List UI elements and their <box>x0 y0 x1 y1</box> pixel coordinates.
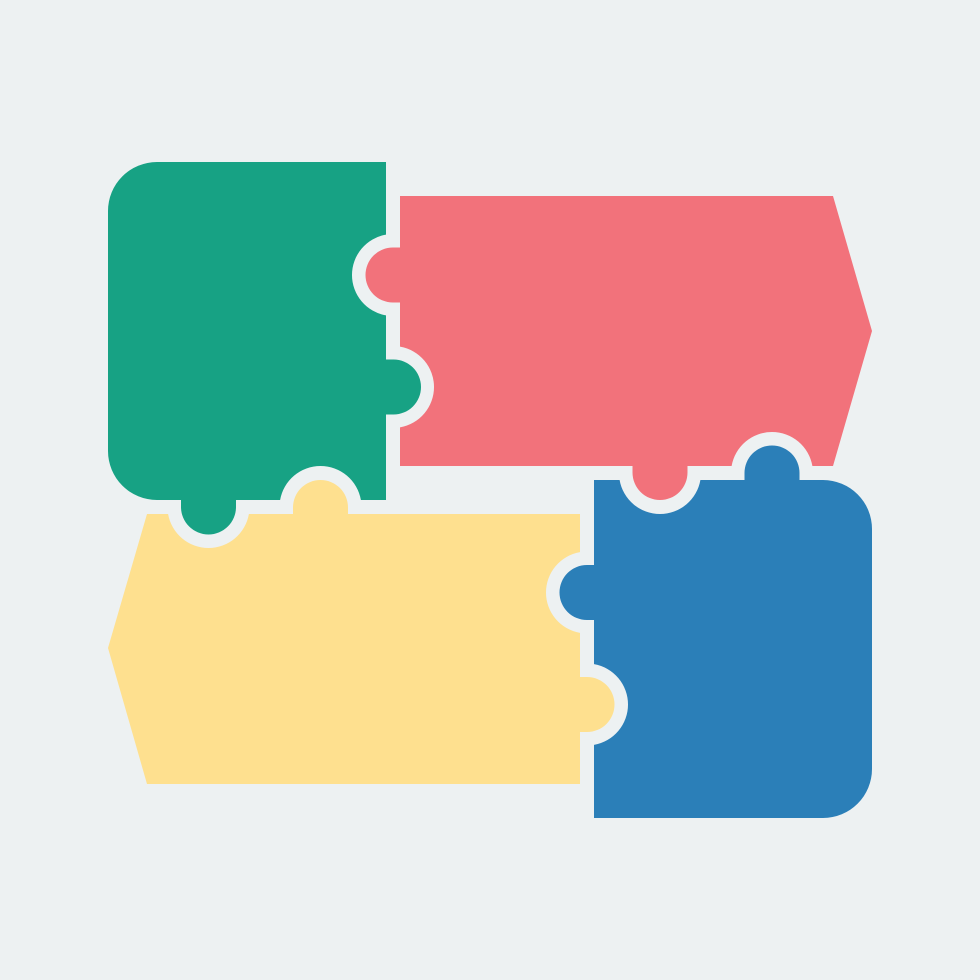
panel: blue puzzle piece <box>559 445 872 818</box>
panel: green puzzle piece <box>108 162 421 534</box>
panel: yellow arrow puzzle piece <box>108 480 614 784</box>
panel: red arrow puzzle piece <box>366 196 872 500</box>
